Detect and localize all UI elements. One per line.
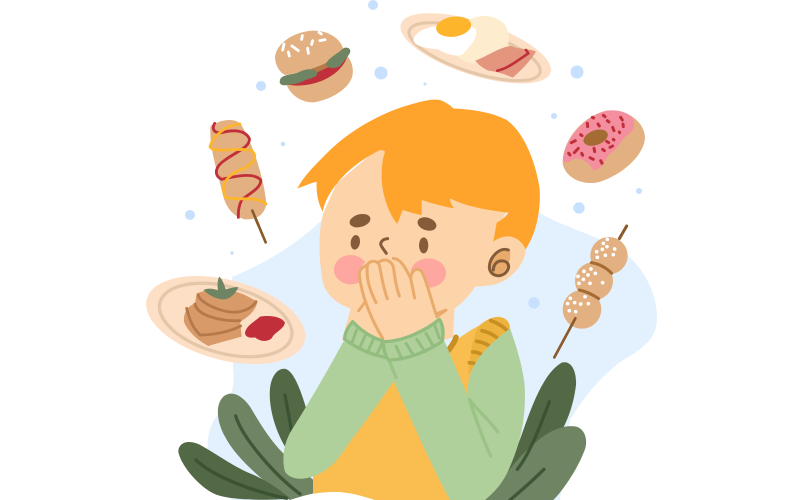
right cuff	[383, 319, 443, 360]
food: donut	[563, 110, 645, 183]
food: egg and bacon plate	[393, 0, 559, 98]
sauce	[245, 316, 285, 341]
right cheek	[411, 258, 446, 288]
white bottom patch	[290, 492, 375, 500]
sprinkles	[569, 115, 623, 163]
leaf: right front	[485, 426, 586, 500]
face and head	[297, 100, 540, 340]
skewer lower part	[554, 318, 575, 357]
left cuff	[345, 322, 386, 357]
leaf: right back	[487, 362, 576, 500]
left sleeve	[283, 342, 397, 479]
meat slices	[184, 290, 257, 346]
ear	[467, 236, 526, 287]
left eyebrow	[348, 212, 372, 230]
floating bubbles	[185, 0, 642, 309]
mustard line	[210, 124, 266, 204]
tomato	[285, 57, 347, 86]
food: corn dog	[210, 120, 266, 242]
food: dango skewer	[554, 226, 628, 357]
ear detail	[489, 249, 510, 276]
dango balls	[590, 237, 628, 274]
dough	[563, 110, 645, 183]
plate rim	[151, 270, 300, 370]
nose	[381, 239, 388, 253]
icing	[563, 110, 634, 170]
face	[319, 147, 507, 317]
food: burger	[275, 31, 353, 102]
bacon streak	[497, 50, 528, 71]
bacon	[475, 46, 536, 78]
boy	[283, 100, 540, 500]
bottom bun	[286, 55, 353, 102]
plate	[393, 0, 559, 98]
leaf: back left	[270, 369, 310, 450]
top bun	[275, 31, 343, 75]
hair	[297, 100, 540, 249]
leaf: front left	[178, 442, 290, 500]
right sleeve and shoulder	[383, 328, 525, 500]
left eye	[350, 234, 361, 250]
food: left plate with meat and sauce	[136, 260, 315, 380]
hand	[359, 258, 446, 340]
leaf veins	[196, 395, 549, 500]
garnish	[203, 277, 238, 299]
egg yolk	[435, 14, 473, 39]
dango separators	[579, 263, 612, 299]
lettuce	[280, 48, 350, 85]
sesame seeds	[283, 32, 325, 56]
cuff ribs	[352, 326, 439, 358]
egg white	[413, 23, 476, 55]
plate rim	[403, 11, 546, 93]
donut hole	[581, 126, 610, 149]
background blue blob	[208, 200, 657, 500]
corn dog stick	[252, 211, 266, 242]
sweater cuffs	[345, 319, 443, 360]
plant leaves	[178, 362, 586, 500]
leaf: middle left	[218, 394, 313, 500]
right eye	[419, 237, 428, 253]
neck	[342, 300, 455, 360]
right eyebrow	[416, 215, 438, 233]
sweater	[283, 328, 525, 500]
left cheek	[334, 255, 367, 284]
corn dog body	[210, 120, 266, 219]
plate	[136, 260, 315, 380]
skewer stick	[619, 226, 627, 239]
backpack	[447, 317, 510, 410]
sleeve folds	[388, 358, 498, 456]
rice mound	[457, 16, 509, 63]
sesame dots	[566, 237, 616, 313]
yellow shirt	[313, 378, 456, 500]
ketchup line	[213, 123, 261, 217]
patty	[310, 60, 337, 73]
stick overlap	[252, 211, 258, 225]
